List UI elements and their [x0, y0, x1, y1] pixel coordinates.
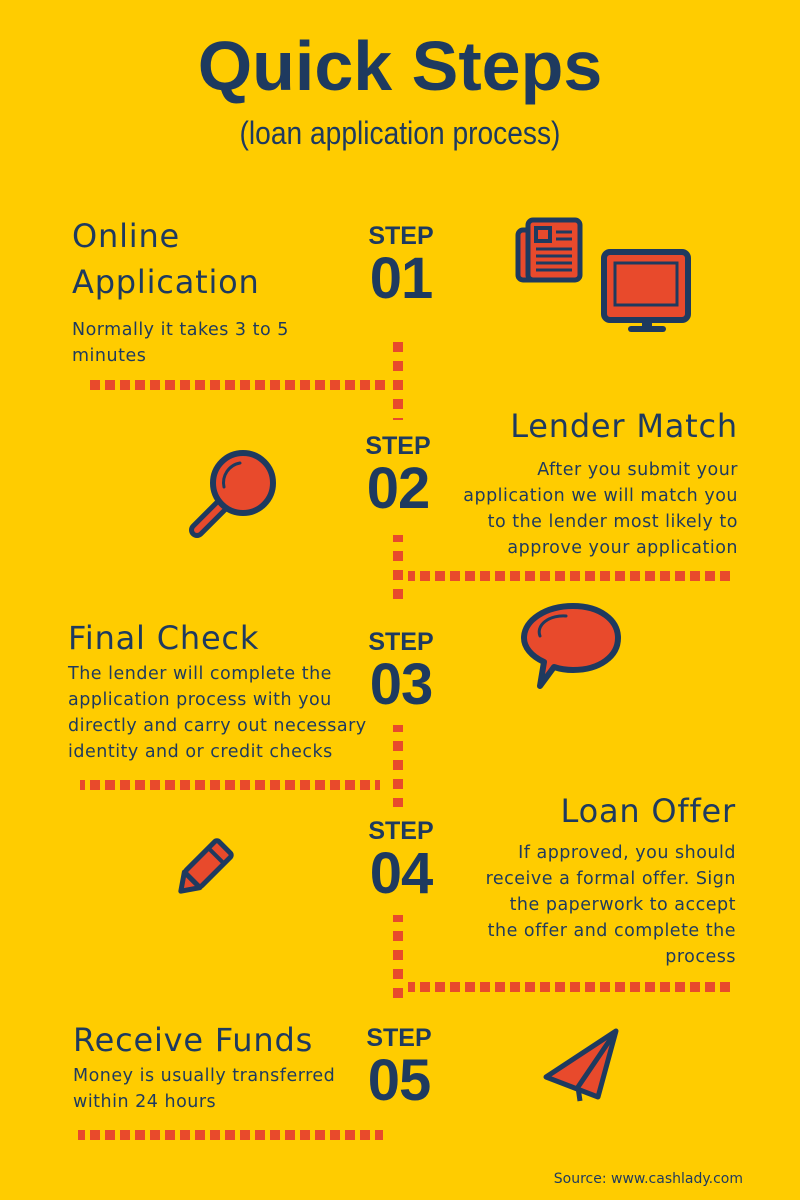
icon: magnifier: [189, 450, 276, 538]
step 5 text: Receive Funds: [73, 1021, 313, 1059]
step 5 text: within 24 hours: [73, 1092, 216, 1112]
step 4 text: If approved, you should: [518, 843, 736, 863]
step 3 label: STEP: [368, 628, 434, 656]
step 1 text: minutes: [72, 346, 146, 366]
source: Source: www.cashlady.com: [554, 1171, 743, 1187]
step 1 label: 01: [370, 246, 432, 311]
step 3 text: directly and carry out necessary: [68, 716, 367, 736]
step 3 text: The lender will complete the: [68, 664, 332, 684]
step 3 text: application process with you: [68, 690, 332, 710]
step 1 label: STEP: [368, 222, 434, 250]
step 2 label: STEP: [365, 432, 431, 460]
step 4 text: [486, 792, 736, 967]
step 2 text: application we will match you: [463, 486, 738, 506]
title: Quick Steps: [198, 27, 602, 105]
step 1 text: Normally it takes 3 to 5: [72, 320, 289, 340]
step 4 label: 04: [370, 841, 432, 906]
step 5 label: STEP: [366, 1024, 432, 1052]
step 2 text: approve your application: [507, 538, 738, 558]
step 3 label: [368, 628, 434, 717]
icon: pencil: [178, 838, 234, 894]
step 3 label: 03: [370, 652, 432, 717]
subtitle: (loan application process): [240, 115, 560, 151]
step 2 text: to the lender most likely to: [488, 512, 738, 532]
step 5 text: Money is usually transferred: [73, 1066, 335, 1086]
step 2 label: [365, 432, 431, 521]
icon: speech bubble: [521, 603, 621, 689]
icon: paper plane: [544, 1028, 618, 1102]
step 4 label: STEP: [368, 817, 434, 845]
step 3 text: Final Check: [68, 619, 259, 657]
step 4 text: receive a formal offer. Sign: [486, 869, 736, 889]
step 3 text: [68, 619, 367, 762]
step 5 label: [366, 1024, 432, 1113]
step 5 label: 05: [368, 1048, 430, 1113]
step 4 text: the paperwork to accept: [510, 895, 736, 915]
step 2 text: After you submit your: [537, 460, 738, 480]
icon: newspaper and monitor: [516, 218, 691, 332]
step 5 text: [73, 1021, 335, 1112]
step 1 text: Application: [72, 263, 260, 301]
step 2 label: 02: [367, 456, 429, 521]
step 4 text: the offer and complete the: [488, 921, 736, 941]
step 1 text: [72, 217, 289, 366]
step 3 text: identity and or credit checks: [68, 742, 333, 762]
step 1 label: [368, 222, 434, 311]
step 2 text: [463, 407, 738, 558]
step 4 text: process: [665, 947, 736, 967]
step 2 text: Lender Match: [510, 407, 738, 445]
step 1 text: Online: [72, 217, 180, 255]
step 4 label: [368, 817, 434, 906]
step 4 text: Loan Offer: [561, 792, 736, 830]
